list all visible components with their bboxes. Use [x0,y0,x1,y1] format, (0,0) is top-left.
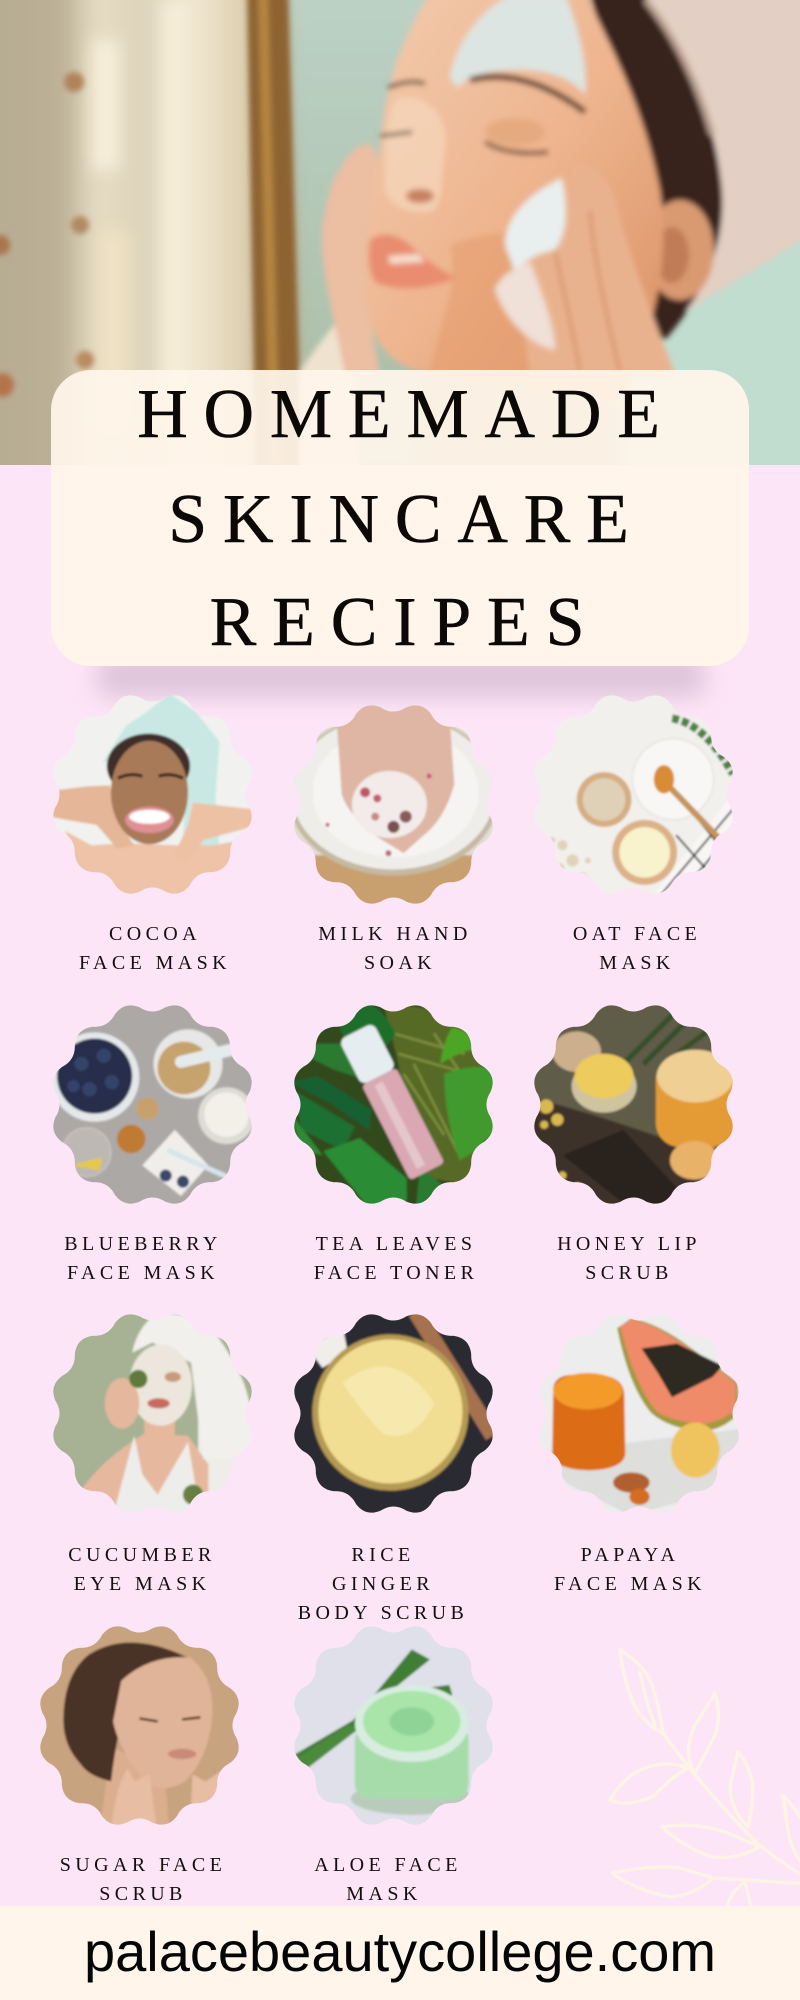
label: blueberry face mask: FACE MASK [67,1262,219,1284]
thumbnail: papaya face mask [528,1302,751,1525]
honey jar [656,1056,735,1147]
label: sugar face scrub: SUGAR FACE [60,1854,226,1876]
label: aloe face mask: ALOE FACE [314,1854,462,1876]
label: rice ginger body scrub: RICE [351,1544,415,1566]
label: papaya face mask: FACE MASK [554,1573,706,1595]
orange cheek shade [430,233,525,370]
title text: HOMEMADE [137,376,676,453]
title text: SKINCARE [168,481,645,558]
footer band with website: palacebeautycollege.com [84,1920,716,1983]
closed eyes [380,132,412,136]
hands [111,1768,158,1837]
cream jar [355,1726,469,1799]
sugar bowl [552,1031,601,1072]
thumbnail: aloe face mask [282,1614,505,1837]
forehead mask [450,0,586,95]
nostril [406,189,434,203]
label: papaya face mask: PAPAYA [581,1544,679,1566]
shoulders [64,830,233,894]
green sprig [672,718,733,774]
thumbnail: cocoa face mask [53,696,252,894]
label: milk hand soak: MILK HAND [318,923,472,945]
ear [646,200,714,300]
footer band with website [0,1906,800,2000]
right hand [524,174,676,370]
blueberry bowl [50,1032,139,1122]
thumbnail: cucumber eye mask [41,1302,264,1525]
napkin with spoon and berries [142,1130,208,1196]
hero photo: woman applying face mask [0,0,800,490]
scattered oats [550,836,592,876]
neck [99,1746,170,1837]
title card shadow [98,655,704,697]
title text: RECIPES [210,584,600,661]
honeycomb [671,1423,720,1477]
label: blueberry face mask: BLUEBERRY [64,1233,222,1255]
thumbnail: blueberry face mask [53,1005,252,1204]
checked cloth [649,784,745,906]
left hand [322,144,380,375]
masked face [129,1344,192,1426]
small jars [136,1097,159,1120]
masked face [111,741,188,844]
jar shadow [351,1782,473,1815]
turmeric root [613,1472,650,1493]
title card [51,370,749,666]
aloe leaves [292,1649,452,1758]
thumbnail: oat face mask [534,696,733,894]
thumbnail: tea leaves face toner [294,1005,493,1204]
label: cucumber eye mask: CUCUMBER [68,1544,216,1566]
neck [144,1408,175,1444]
label: sugar face scrub: SCRUB [99,1883,187,1905]
label: cocoa face mask: FACE MASK [79,952,231,974]
towel [642,0,800,312]
hand and cucumber slice [105,1378,139,1429]
thumbnail: sugar face scrub [28,1614,251,1837]
thumbnail: milk hand soak [294,705,493,904]
lips [369,235,456,288]
label: honey lip scrub: HONEY LIP [557,1233,701,1255]
cream pot [612,820,677,885]
hair [63,1642,187,1781]
eyebrows [388,82,425,88]
plate [661,794,662,795]
wooden board [522,1094,745,1216]
label: oat face mask: MASK [599,952,675,974]
thumbnail: honey lip scrub [522,993,745,1216]
label: rice ginger body scrub: GINGER [332,1573,434,1595]
thumbnail: rice ginger body scrub [282,1302,505,1525]
wooden honey dipper [669,786,719,838]
orange jar [552,1374,625,1470]
oat pot [577,772,631,827]
label: milk hand soak: SOAK [364,952,436,974]
face [113,1657,213,1788]
label: aloe face mask: MASK [346,1883,422,1905]
towel [132,1312,254,1459]
label: oat face mask: OAT FACE [573,923,701,945]
label: honey lip scrub: SCRUB [585,1262,673,1284]
cream glass [198,1087,255,1144]
crumbs [539,1099,581,1189]
foam pump bottle [339,1023,444,1180]
arms [46,785,134,848]
cream on cheek [505,178,566,272]
label: cocoa face mask: COCOA [109,923,201,945]
towel [103,693,219,853]
yellow scrub bowl [572,1060,637,1113]
oat bowl with pestle [154,1029,223,1098]
decorative leaf branch [610,1650,800,1910]
nose highlight [385,97,446,213]
monstera leaves [444,1067,500,1160]
petri dish with lemon [62,1128,111,1177]
label: tea leaves face toner: FACE TONER [314,1262,478,1284]
label: cucumber eye mask: EYE MASK [74,1573,210,1595]
body [79,1434,208,1525]
face [365,0,663,400]
label: rice ginger body scrub: BODY SCRUB [298,1602,468,1624]
label: tea leaves face toner: TEA LEAVES [316,1233,476,1255]
scrub lump [670,1141,719,1180]
papaya [617,1318,739,1431]
hair [590,0,722,340]
